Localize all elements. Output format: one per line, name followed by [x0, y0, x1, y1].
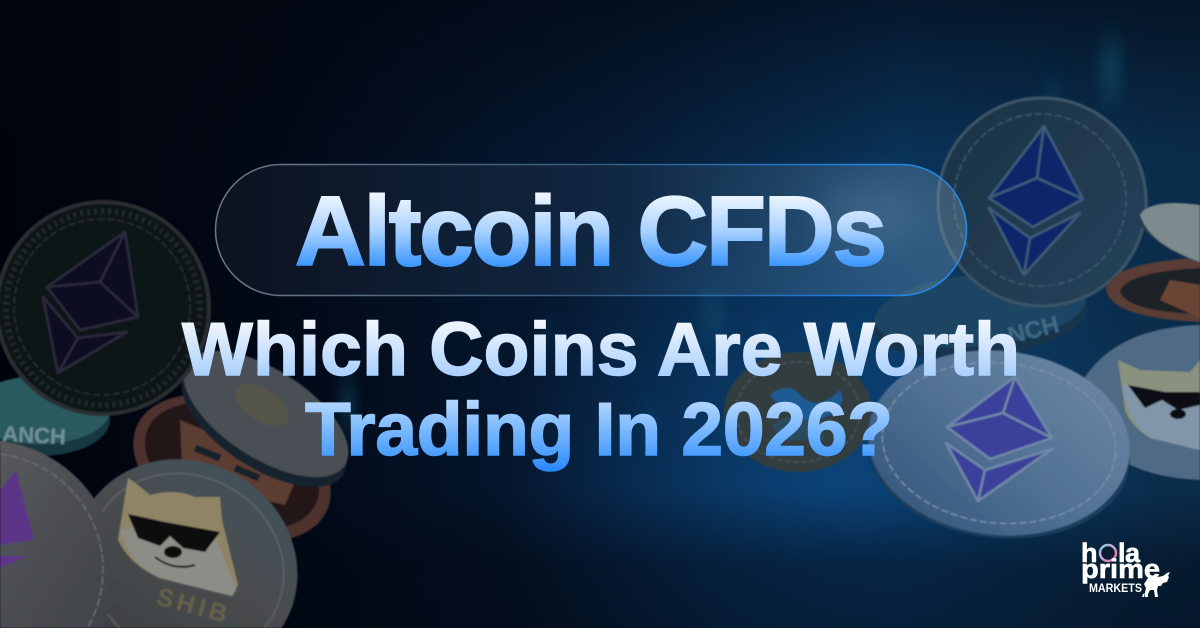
logo wordmark prime: prime	[1081, 554, 1160, 584]
left coin group	[0, 200, 369, 628]
coin: Shiba coin: SHIB	[153, 583, 230, 628]
coin: front silver Ethereum coin	[859, 338, 1139, 551]
logo: Hola Prime Markets	[1081, 538, 1170, 597]
coin: NCH back coin	[868, 263, 1092, 369]
icon: bull	[1142, 572, 1170, 597]
subtitle line 2: Trading In 2026?	[305, 387, 893, 471]
coin: Shiba coin	[74, 459, 298, 628]
glass highlight	[815, 183, 925, 247]
coin: tilted silver coin	[161, 326, 369, 512]
coin: silver Ethereum coin	[0, 441, 116, 628]
title pill	[216, 164, 966, 296]
coin: teal ANCH coin	[0, 376, 110, 456]
logo wordmark hola: hola	[1081, 538, 1141, 568]
coin: NCH back coin: NCH	[1005, 311, 1062, 350]
faint candlestick chart	[340, 20, 1122, 470]
logo ring	[1100, 545, 1116, 561]
coin: teal ANCH coin: ANCH	[2, 421, 67, 449]
coin: top Ethereum coin	[936, 96, 1148, 308]
logo wordmark markets: MARKETS	[1089, 583, 1142, 595]
coin: copper doge coin	[110, 365, 354, 571]
title: Altcoin CFDs: Altcoin CFDs	[295, 176, 887, 286]
subtitle	[182, 307, 1020, 471]
coin: top right tilted coin	[1106, 203, 1200, 322]
right coin group	[724, 96, 1200, 551]
subtitle line 1: Which Coins Are Worth	[182, 307, 1020, 391]
coin: right Shiba coin	[1072, 325, 1200, 480]
coin: ripple coin	[724, 352, 872, 472]
coin: dark Ethereum coin	[0, 200, 211, 416]
